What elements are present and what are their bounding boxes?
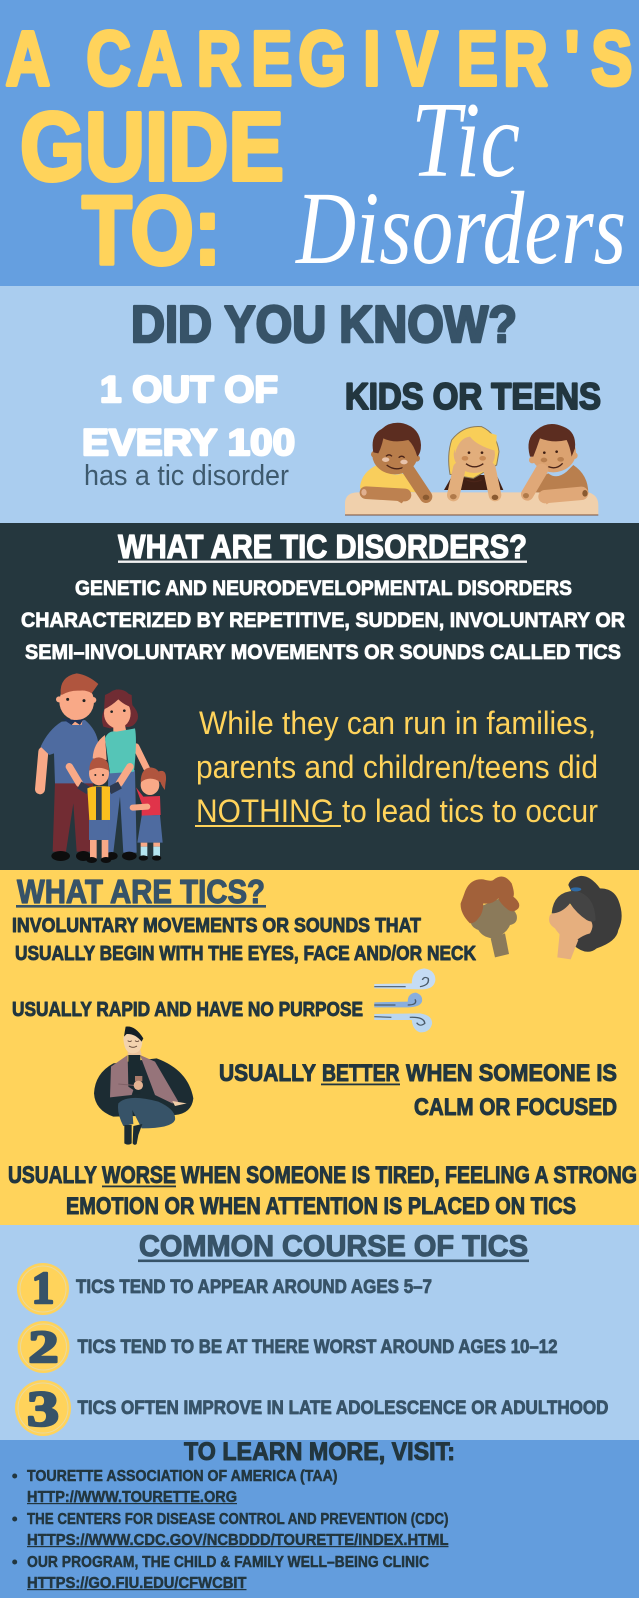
resource: child and family clinic <box>12 1554 429 1592</box>
step 1 <box>17 1263 432 1315</box>
step 1: 1 <box>32 1263 54 1313</box>
resource: cdc: THE CENTERS FOR DISEASE CONTROL AND PREVENTION (CDC) <box>27 1511 448 1528</box>
statistic: 1 out of every 100: has a tic disorder <box>84 460 289 492</box>
resource: tourette association: HTTP://WWW.TOURETTE.ORG <box>27 1489 237 1506</box>
resource: child and family clinic: OUR PROGRAM, THE CHILD & FAMILY WELL–BEING CLINIC <box>27 1554 429 1571</box>
definition text: GENETIC AND NEURODEVELOPMENTAL DISORDERS <box>75 577 572 600</box>
resource: tourette association <box>12 1468 337 1506</box>
text: better when calm: WHEN SOMEONE IS <box>406 1060 617 1087</box>
panel: common course of tics <box>0 1225 639 1440</box>
definition text <box>21 577 625 664</box>
heading: common course: COMMON COURSE OF TICS <box>139 1230 528 1263</box>
text: involuntary movements: INVOLUNTARY MOVEMENTS OR SOUNDS THAT <box>12 915 421 937</box>
statistic: 1 out of every 100: EVERY 100 <box>82 422 295 463</box>
panel: what are tic disorders <box>0 523 639 870</box>
text: better when calm: BETTER <box>322 1060 400 1087</box>
panel: what are tics <box>0 870 639 1225</box>
heading: to learn more: TO LEARN MORE, VISIT: <box>184 1438 455 1466</box>
text: better when calm: USUALLY <box>219 1060 316 1087</box>
callout: nothing to lead tics: parents and children/teens did <box>196 749 598 785</box>
resource: cdc: HTTPS://WWW.CDC.GOV/NCBDDD/TOURETTE/INDEX.HTML <box>27 1532 449 1549</box>
callout: nothing to lead tics: to lead tics to occur <box>342 793 598 829</box>
heading: what are tics: WHAT ARE TICS? <box>17 873 265 910</box>
panel: did you know <box>0 286 639 523</box>
step 3: 3 <box>27 1380 59 1436</box>
title: a caregiver's: A CAREGIVER'S <box>6 15 632 102</box>
icon: three kids at a table <box>345 423 598 515</box>
panel: to learn more <box>0 1438 639 1598</box>
text: involuntary movements: USUALLY BEGIN WITH THE EYES, FACE AND/OR NECK <box>15 943 476 965</box>
icon: family <box>40 673 166 863</box>
title: guide: GUIDE <box>20 92 284 201</box>
heading: did you know: DID YOU KNOW? <box>131 296 517 354</box>
heading: kids or teens: KIDS OR TEENS <box>345 376 601 417</box>
text: rapid: USUALLY RAPID AND HAVE NO PURPOSE <box>12 999 363 1021</box>
step 2: TICS TEND TO BE AT THERE WORST AROUND AGES 10–12 <box>78 1337 558 1358</box>
step 2: 2 <box>28 1322 58 1372</box>
resource: child and family clinic: HTTPS://GO.FIU.EDU/CFWCBIT <box>27 1575 247 1592</box>
statistic: 1 out of every 100: 1 OUT OF <box>100 369 278 410</box>
resource: cdc <box>12 1511 449 1549</box>
text: worse when tired: WORSE <box>102 1162 176 1189</box>
icon: relaxed man on beanbag <box>94 1026 193 1145</box>
callout: nothing to lead tics: NOTHING <box>196 793 334 829</box>
step 1: TICS TEND TO APPEAR AROUND AGES 5–7 <box>76 1277 432 1298</box>
callout: nothing to lead tics: While they can run in families, <box>199 705 596 741</box>
title: to: TO: <box>82 176 221 285</box>
heading: what are tic disorders: WHAT ARE TIC DISORDERS? <box>118 528 527 565</box>
resource: tourette association: TOURETTE ASSOCIATION OF AMERICA (TAA) <box>27 1468 338 1485</box>
title: tic: Tic <box>411 81 520 200</box>
text: involuntary movements <box>12 915 476 965</box>
icon: two heads <box>461 876 622 959</box>
statistic: 1 out of every 100 <box>82 369 295 492</box>
definition text: SEMI–INVOLUNTARY MOVEMENTS OR SOUNDS CALLED TICS <box>25 641 621 664</box>
icon: wind <box>374 968 435 1032</box>
callout: nothing to lead tics <box>195 705 598 829</box>
step 3 <box>15 1380 608 1436</box>
text: better when calm <box>219 1060 617 1121</box>
text: worse when tired <box>8 1162 637 1220</box>
step 2 <box>18 1321 558 1373</box>
panel: title banner <box>0 0 639 286</box>
text: worse when tired: USUALLY <box>8 1162 97 1189</box>
